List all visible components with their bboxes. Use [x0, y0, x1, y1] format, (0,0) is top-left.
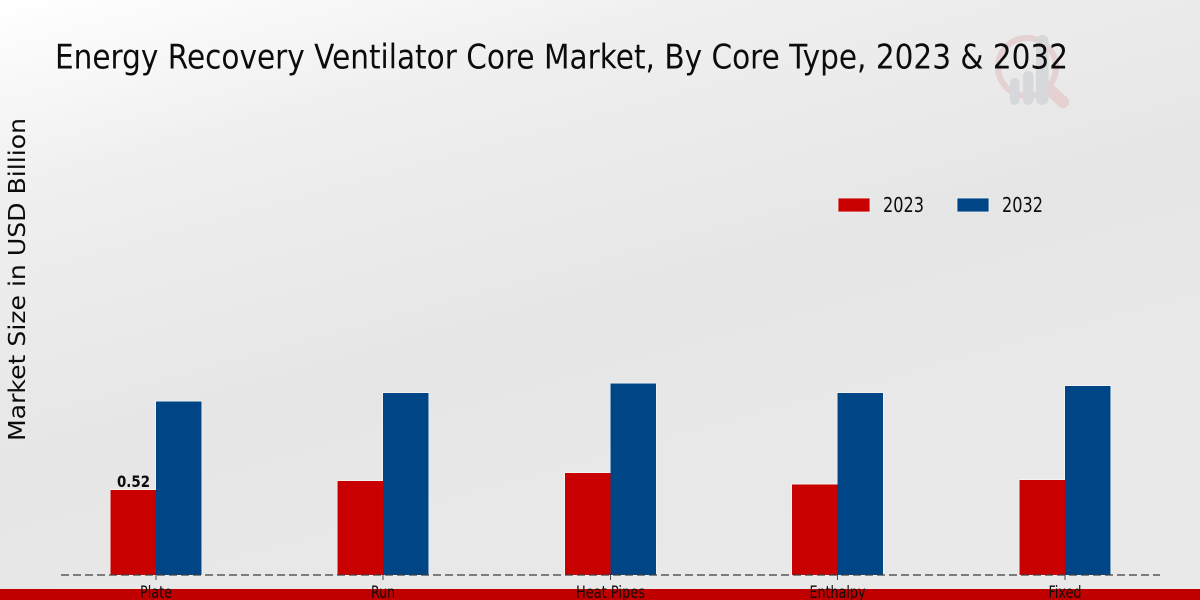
legend swatch 2032: [957, 198, 989, 212]
category: Plate: [110, 402, 202, 575]
x axis baseline: [61, 574, 1160, 576]
legend: [838, 193, 1043, 217]
bar chart: [110, 384, 1110, 575]
category: Enthalpy: [792, 393, 883, 575]
y axis label: Market Size in USD Billion: [5, 118, 31, 441]
legend label 2032: 2032: [1002, 193, 1043, 217]
category: Fixed: [1020, 386, 1110, 575]
category: Run: [338, 393, 428, 575]
legend label 2023: 2023: [883, 193, 924, 217]
x axis labels: [140, 583, 1082, 600]
data label 0.52: 0.52: [117, 472, 150, 491]
legend swatch 2023: [838, 198, 870, 212]
category: Heat Pipes: [565, 384, 656, 575]
footer bar: [0, 589, 1200, 600]
icon: watermark logo: [998, 35, 1063, 105]
bar outlines: [110, 384, 1110, 575]
title: Energy Recovery Ventilator Core Market, By Core Type, 2023 & 2032: [55, 38, 1068, 76]
